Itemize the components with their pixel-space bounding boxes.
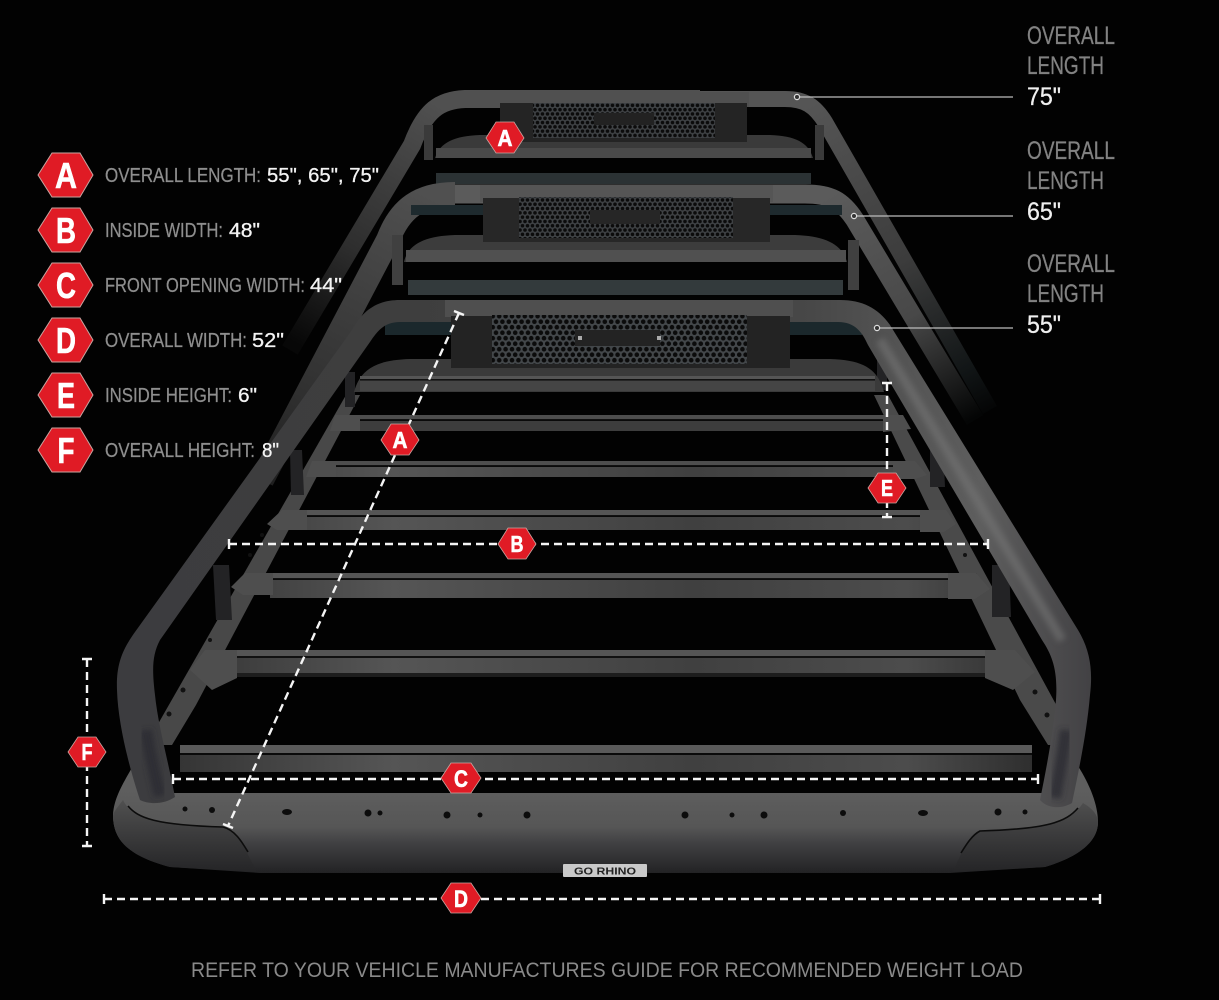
legend row D: D <box>56 320 76 361</box>
middle rack mesh <box>519 197 733 238</box>
middle rack posts <box>392 235 859 290</box>
back rack mesh <box>533 103 715 138</box>
legend row F: F <box>58 430 74 471</box>
overall length callout: 75 inch: LENGTH <box>1027 52 1104 80</box>
legend row B: 48" <box>229 220 260 242</box>
front rack: 55 inch <box>113 300 1098 878</box>
dimension F: F <box>82 739 92 765</box>
dimension B <box>229 528 988 559</box>
go rhino badge <box>563 864 647 878</box>
middle rack right tube <box>455 194 975 420</box>
legend row F: OVERALL HEIGHT: <box>105 440 255 462</box>
dimension C <box>173 763 1038 793</box>
legend row A <box>38 153 379 197</box>
legend row C: 44" <box>310 275 342 297</box>
dimension A top badge <box>486 122 524 153</box>
crossbar brackets <box>190 415 1035 690</box>
legend row C: FRONT OPENING WIDTH: <box>105 275 305 297</box>
legend row A: OVERALL LENGTH: <box>105 165 261 187</box>
crossbars <box>180 376 1032 772</box>
overall length callout: 75 inch: 75" <box>1027 83 1061 111</box>
legend row E: 6" <box>238 385 257 407</box>
dimension D: D <box>454 886 468 913</box>
overall length callout: 65 inch: OVERALL <box>1027 137 1115 165</box>
light bar bolts <box>578 336 661 340</box>
back rack low hoop <box>435 135 813 158</box>
middle rack low bar <box>408 280 843 295</box>
overall length callout: 65 inch: LENGTH <box>1027 167 1104 195</box>
legend row D <box>38 318 284 362</box>
overall length callout: 55 inch <box>874 250 1115 339</box>
middle rack teal bars <box>411 205 842 215</box>
overall length callout: 75 inch: OVERALL <box>1027 22 1115 50</box>
middle rack light bar plate <box>483 198 770 242</box>
middle rack center plate <box>590 210 660 224</box>
back rack top band <box>498 92 749 107</box>
dimension A <box>223 311 464 828</box>
overall length callout: 55 inch: LENGTH <box>1027 280 1104 308</box>
dimension F <box>68 659 106 846</box>
rail holes <box>166 533 1050 718</box>
bumper <box>113 766 1098 873</box>
legend row B: INSIDE WIDTH: <box>105 220 223 242</box>
tube highlight right <box>880 340 1062 640</box>
legend row E: INSIDE HEIGHT: <box>105 385 232 407</box>
upright posts <box>213 345 1011 620</box>
dimension C: C <box>454 766 468 793</box>
light bar center plate <box>575 330 660 346</box>
legend row F <box>38 428 279 472</box>
dimension E <box>868 383 906 517</box>
legend row D: 52" <box>252 330 284 352</box>
legend row C: C <box>56 265 76 306</box>
light bar plate <box>451 316 790 368</box>
teal back bars <box>385 322 862 335</box>
light bar mesh <box>492 315 747 364</box>
overall length callout: 75 inch <box>794 22 1115 111</box>
footer note: REFER TO YOUR VEHICLE MANUFACTURES GUIDE FOR RECOMMENDED WEIGHT LOAD <box>191 959 1023 982</box>
legend row D: OVERALL WIDTH: <box>105 330 247 352</box>
legend row B <box>38 208 260 252</box>
bumper end cap right <box>953 803 1098 872</box>
back rack posts <box>424 125 824 160</box>
bumper end cap left <box>113 800 257 872</box>
legend row A: A <box>55 155 77 196</box>
bumper holes <box>182 806 1028 818</box>
dimension E: E <box>881 475 893 501</box>
legend row C <box>38 263 342 307</box>
main hoop tube <box>117 300 1091 807</box>
tube shading front left <box>146 730 160 796</box>
middle rack low hoop <box>404 235 847 262</box>
legend row A: 55", 65", 75" <box>267 165 379 187</box>
tube shading front right <box>1055 730 1066 798</box>
middle rack: 65 inch <box>262 185 975 480</box>
legend row B: B <box>56 210 76 251</box>
back rack left fade tube <box>290 99 700 350</box>
middle rack top band <box>480 185 773 202</box>
overall length callout: 55 inch: 55" <box>1027 311 1061 339</box>
bumper seams <box>128 806 1078 853</box>
dimension A top badge: A <box>498 125 512 151</box>
back rack light bar plate <box>500 103 747 142</box>
side rail right <box>874 395 1078 745</box>
dimension A: A <box>392 427 408 453</box>
overall length callout: 55 inch: OVERALL <box>1027 250 1115 278</box>
overall length callout: 65 inch: 65" <box>1027 198 1061 226</box>
back rack low hoop bar <box>436 148 811 158</box>
middle rack left tube <box>262 194 455 480</box>
back rack low bar <box>436 173 811 184</box>
top band <box>445 300 793 317</box>
dimension B: B <box>510 531 524 557</box>
middle rack low hoop bar <box>406 250 846 262</box>
back rack center plate <box>594 113 654 125</box>
back rack side tubes and hoop <box>700 99 990 410</box>
legend row F: 8" <box>262 440 279 462</box>
legend row E: E <box>57 375 75 416</box>
low hoop <box>354 359 884 392</box>
overall length callout: 65 inch <box>851 137 1115 226</box>
dimension D <box>104 883 1100 913</box>
go rhino badge: GO RHINO <box>574 866 636 878</box>
legend <box>38 153 379 472</box>
legend row E <box>38 373 257 417</box>
side rail left <box>146 395 360 745</box>
back rack: 75 inch <box>290 92 990 410</box>
